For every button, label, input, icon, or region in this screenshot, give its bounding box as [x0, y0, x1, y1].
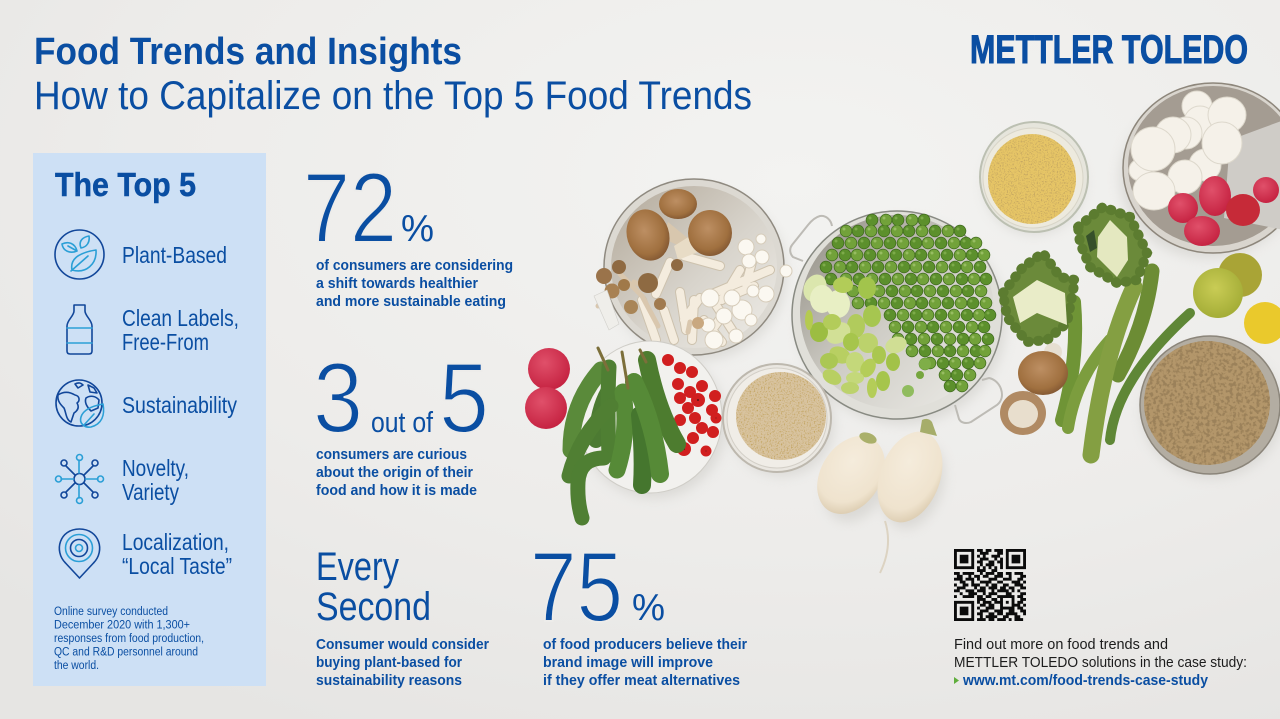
white shimeji mushrooms [598, 234, 792, 349]
paper tag [594, 290, 619, 330]
stat: 75 percent: % [632, 587, 665, 629]
survey note [54, 606, 204, 672]
stat: 3 out of 5: out of [371, 407, 434, 439]
pea pods [569, 348, 677, 518]
stat: 3 out of 5: food and how it is made [316, 482, 477, 499]
daikon radishes [803, 419, 954, 573]
case study call to action: www.mt.com/food-trends-case-study [962, 672, 1209, 689]
pan of radishes and sliced daikon [1123, 83, 1280, 253]
broccoli florets [1003, 207, 1147, 342]
stat: 72 percent [303, 152, 513, 310]
stat: 75 percent: of food producers believe their [543, 636, 747, 653]
panel: the top 5 [33, 153, 266, 686]
fava bean pods [1062, 271, 1190, 455]
left radishes [525, 348, 570, 429]
icon: novelty network [56, 454, 104, 504]
jar of millet [980, 122, 1088, 232]
stat: every second: Every [316, 545, 399, 589]
label: clean labels: Clean Labels, [122, 305, 239, 331]
stat: every second [316, 545, 489, 689]
panel heading: The Top 5 [55, 166, 196, 203]
food shadows [582, 98, 1280, 537]
brown mushrooms [1000, 343, 1068, 435]
stat: 72 percent: a shift towards healthier [316, 275, 478, 292]
stat: 72 percent: of consumers are considering [316, 257, 513, 274]
stat: 3 out of 5 [313, 342, 489, 499]
label: novelty: Variety [122, 479, 179, 505]
stat: 72 percent: 72 [303, 152, 397, 263]
icon: globe with leaf [56, 380, 104, 427]
survey note: responses from food production, [54, 633, 204, 645]
icon: bottle [67, 305, 92, 354]
pan of peas and fava beans [790, 211, 1002, 423]
survey note: QC and R&D personnel around [54, 646, 198, 658]
label: localization: “Local Taste” [122, 553, 232, 579]
case study call to action [954, 636, 1247, 689]
daikon slices [1129, 91, 1246, 210]
brown mushrooms [596, 189, 732, 314]
label: clean labels [122, 305, 239, 355]
label: novelty: Novelty, [122, 455, 189, 481]
fava beans [799, 271, 909, 398]
stat: 3 out of 5: consumers are curious [316, 446, 467, 463]
plate with pea pods and chillies [569, 341, 722, 518]
case study call to action: METTLER TOLEDO solutions in the case study: [954, 654, 1247, 671]
qr code [954, 550, 1026, 620]
survey note: the world. [54, 660, 99, 672]
stat: 72 percent: % [401, 208, 434, 250]
red radishes [1168, 176, 1279, 246]
pan handles [790, 216, 1002, 423]
stat: 3 out of 5: 3 [313, 342, 363, 453]
stat: 75 percent: 75 [530, 531, 623, 642]
stat: 3 out of 5: 5 [439, 342, 489, 453]
stat: 75 percent: brand image will improve [543, 654, 713, 671]
title: How to Capitalize on the Top 5 Food Trends [34, 74, 752, 118]
label: localization [122, 529, 232, 579]
title: Food Trends and Insights [34, 31, 462, 73]
stat: 3 out of 5: about the origin of their [316, 464, 473, 481]
label: plant-based: Plant-Based [122, 242, 227, 268]
icon: plant-based leaf [55, 230, 104, 279]
sliced chillies [665, 357, 718, 454]
survey note: Online survey conducted [54, 606, 168, 618]
label: novelty [122, 455, 189, 505]
peas [824, 218, 990, 397]
icon: location pin [59, 529, 100, 578]
stat: 72 percent: and more sustainable eating [316, 293, 506, 310]
stat: every second: sustainability reasons [316, 672, 462, 689]
label: clean labels: Free-From [122, 329, 209, 355]
pan of mushrooms [594, 179, 792, 355]
stat: every second: Consumer would consider [316, 636, 489, 653]
stat: every second: Second [316, 585, 431, 629]
bowl of wheat grain [1140, 336, 1280, 474]
label: sustainability: Sustainability [122, 392, 237, 418]
stat: 75 percent: if they offer meat alternatives [543, 672, 740, 689]
survey note: December 2020 with 1,300+ [54, 620, 190, 632]
case study call to action: Find out more on food trends and [954, 636, 1168, 653]
title [34, 31, 752, 118]
jar of quinoa [723, 364, 831, 472]
stat: 75 percent [530, 531, 747, 689]
stat: every second: buying plant-based for [316, 654, 462, 671]
label: localization: Localization, [122, 529, 229, 555]
citrus fruit [1193, 253, 1280, 344]
arrow: green link marker [954, 677, 959, 684]
